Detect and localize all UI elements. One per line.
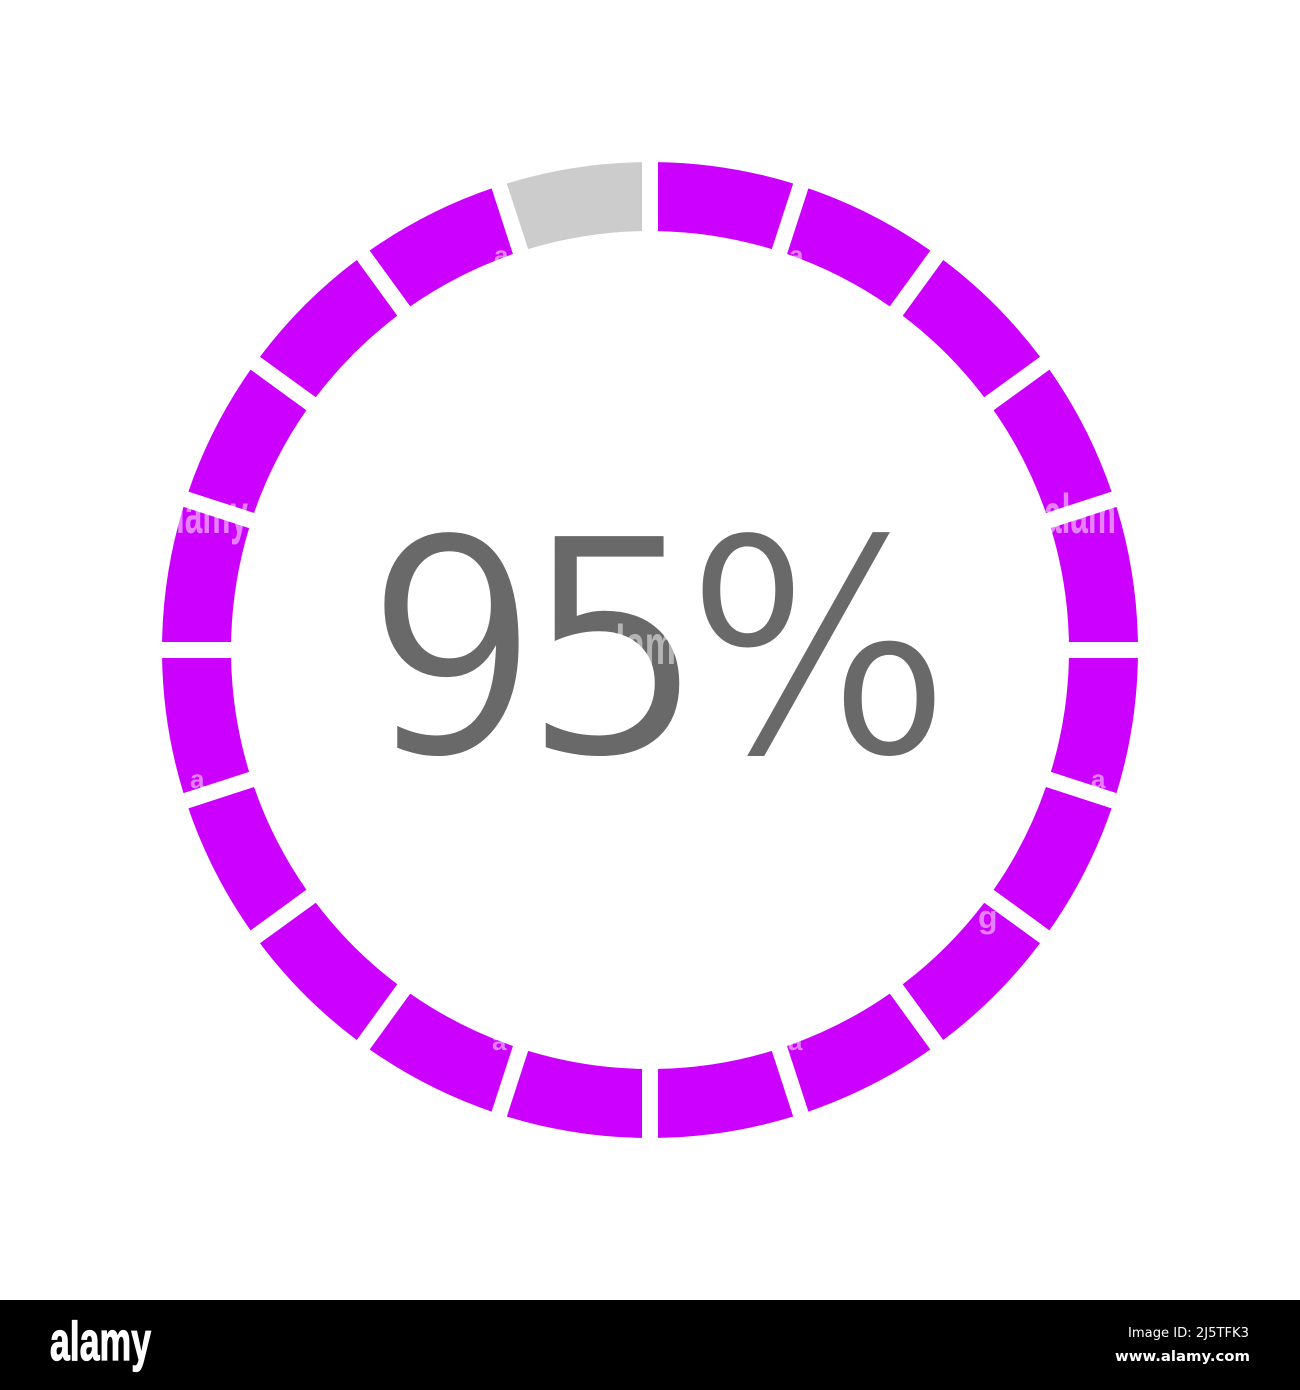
watermark fragments: a bbox=[788, 1026, 803, 1056]
watermark fragments: a bbox=[492, 1026, 507, 1056]
segment 6 bbox=[1051, 658, 1138, 793]
percentage value: % bbox=[685, 475, 952, 826]
watermark fragments: lamy bbox=[176, 482, 248, 545]
segment 9 bbox=[770, 979, 930, 1129]
watermark fragments: a bbox=[1091, 764, 1106, 794]
segment 11 bbox=[507, 1051, 642, 1138]
segment 8 bbox=[890, 892, 1040, 1053]
footer logo: alamy bbox=[50, 1310, 151, 1372]
segment 12 bbox=[363, 987, 519, 1112]
segment 5 bbox=[1034, 507, 1158, 662]
segment 13 bbox=[247, 890, 408, 1040]
percentage value bbox=[365, 475, 952, 826]
segment 7 bbox=[987, 781, 1112, 937]
watermark fragments: alam bbox=[596, 613, 676, 676]
segment 2 bbox=[781, 188, 937, 313]
website: www.alamy.com bbox=[1115, 1349, 1250, 1365]
image id: Image ID: 2J5TFK3 bbox=[1128, 1326, 1249, 1341]
segment 14 bbox=[171, 770, 321, 930]
watermark fragments: a bbox=[789, 240, 804, 270]
segmented progress ring bbox=[142, 142, 1158, 1158]
segment 15 bbox=[142, 638, 266, 793]
segment 1 bbox=[658, 162, 793, 249]
segment 20: remaining (grey) bbox=[507, 142, 662, 266]
segment 3 bbox=[892, 260, 1053, 410]
segment 4 bbox=[979, 370, 1129, 530]
segment 19 bbox=[370, 171, 530, 321]
percentage value: 9 bbox=[365, 475, 540, 826]
watermark fragments: a bbox=[494, 240, 509, 270]
watermark fragments bbox=[176, 240, 1116, 1056]
watermark fragments: g bbox=[978, 899, 998, 935]
segment 10 bbox=[638, 1034, 793, 1158]
segment 16 bbox=[162, 507, 249, 642]
segment 18 bbox=[260, 247, 410, 408]
watermark fragments: alam bbox=[1044, 482, 1116, 545]
footer bar bbox=[0, 1300, 1300, 1390]
percentage value: 5 bbox=[521, 475, 707, 826]
segment 17 bbox=[188, 363, 313, 519]
watermark fragments: a bbox=[190, 764, 205, 794]
